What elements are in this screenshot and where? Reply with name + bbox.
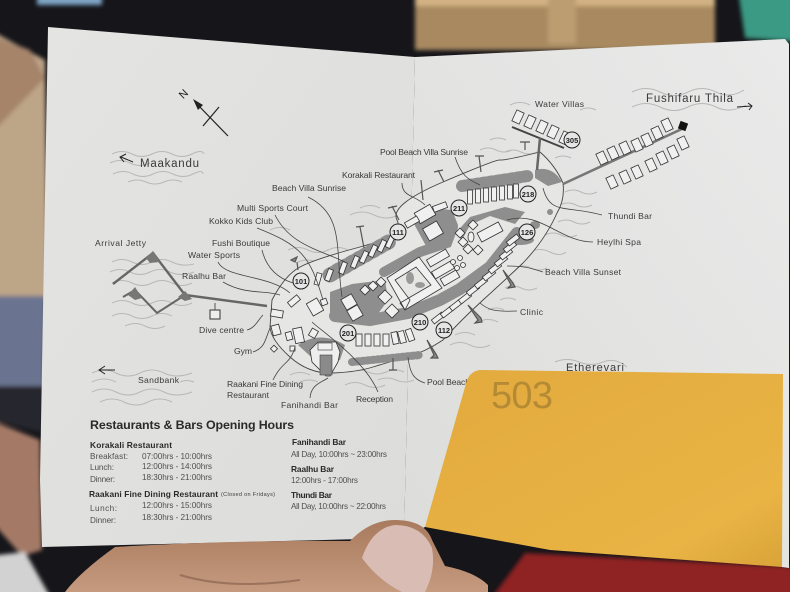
sea waves <box>92 88 746 405</box>
location number markers: 218 <box>522 190 534 199</box>
bars hours: Thundi Bar <box>291 490 333 500</box>
Korakali hours: Korakali Restaurant <box>90 440 172 450</box>
south row villas <box>356 328 415 346</box>
handwritten room number: 503 <box>491 375 553 417</box>
north row villas east <box>468 184 518 204</box>
map labels: Gym <box>234 346 252 356</box>
map labels: Raakani Fine Dining <box>227 379 303 389</box>
restaurant buildings <box>404 202 448 241</box>
yellow envelope <box>425 370 783 567</box>
Korakali hours: 18:30hrs - 21:00hrs <box>142 473 212 482</box>
map labels: Kokko Kids Club <box>209 216 273 226</box>
map labels: Water Sports <box>188 250 240 260</box>
thumb nail <box>362 525 433 592</box>
leader lines <box>218 157 602 398</box>
map labels: Raalhu Bar <box>182 271 226 281</box>
location number markers: 211 <box>453 204 465 213</box>
west shore buildings <box>270 309 318 352</box>
Raakani hours: 12:00hrs - 15:00hrs <box>142 501 212 510</box>
heading: Restaurants & Bars Opening Hours <box>90 418 294 432</box>
small villas centre <box>287 277 399 321</box>
label: Maakandu: Maakandu <box>140 158 199 170</box>
Raakani hours: (Closed on Fridays) <box>221 492 275 498</box>
Raakani hours <box>89 489 275 525</box>
map labels: Arrival Jetty <box>95 238 147 248</box>
bars hours: Fanihandi Bar <box>292 437 347 447</box>
map labels: Beach Villa Sunrise <box>272 183 346 193</box>
location number markers: 305 <box>566 136 578 145</box>
location number markers: 126 <box>521 228 533 237</box>
hand holding the card <box>65 520 488 592</box>
label: Fushifaru Thila: Fushifaru Thila <box>646 93 734 105</box>
panel: opening hours <box>89 418 387 525</box>
panel: right page of card <box>404 39 789 568</box>
location number markers <box>293 132 580 341</box>
location number markers: 101 <box>295 277 307 286</box>
bars hours: Raalhu Bar <box>291 464 335 474</box>
island <box>270 142 563 376</box>
map labels: Dive centre <box>199 325 244 335</box>
north arrow <box>177 87 228 136</box>
map labels: Pool Beach <box>427 377 470 387</box>
label: Sandbank: Sandbank <box>138 375 180 385</box>
bars hours: 12:00hrs - 17:00hrs <box>291 476 358 485</box>
map labels: Fanihandi Bar <box>281 400 338 410</box>
location number markers: 112 <box>438 326 450 335</box>
Korakali hours: Lunch: <box>90 463 114 472</box>
Raakani hours: Lunch: <box>90 504 117 513</box>
location number markers: 201 <box>342 329 354 338</box>
vegetation <box>298 169 562 365</box>
spa building <box>455 220 503 255</box>
Korakali hours: 07:00hrs - 10:00hrs <box>142 452 212 461</box>
map labels: Korakali Restaurant <box>342 170 416 180</box>
map labels: Clinic <box>520 307 544 317</box>
map labels: Multi Sports Court <box>237 203 309 213</box>
label: Etherevari: Etherevari <box>566 362 624 374</box>
location number markers: 210 <box>414 318 426 327</box>
north arrow: N <box>177 87 191 101</box>
bars hours: All Day, 10:00hrs ~ 23:00hrs <box>291 450 387 459</box>
map labels: Heylhi Spa <box>597 237 641 247</box>
map labels: Reception <box>356 394 393 404</box>
east service buildings <box>426 249 466 286</box>
map labels: Water Villas <box>535 99 584 109</box>
map labels: Pool Beach Villa Sunrise <box>380 147 468 157</box>
island outline <box>270 152 563 373</box>
panel: left page of card <box>40 27 415 547</box>
south-east row villas <box>431 234 520 324</box>
label: Fushifaru Thila <box>646 93 752 110</box>
map labels: Beach Villa Sunset <box>545 267 622 277</box>
label: Sandbank <box>99 366 180 385</box>
Raakani hours: Raakani Fine Dining Restaurant <box>89 489 218 499</box>
Korakali hours <box>90 440 212 484</box>
Korakali hours: 12:00hrs - 14:00hrs <box>142 462 212 471</box>
map labels <box>95 99 652 410</box>
location number markers: 111 <box>392 228 404 237</box>
Raakani hours: 18:30hrs - 21:00hrs <box>142 513 212 522</box>
label: Maakandu <box>120 154 199 170</box>
east water villas jetty <box>563 118 689 189</box>
central building <box>387 257 442 310</box>
Raakani hours: Dinner: <box>90 516 116 525</box>
bars hours: All Day, 10:00hrs ~ 22:00hrs <box>291 502 386 511</box>
fanihandi pool and bar <box>310 342 340 376</box>
map labels: Thundi Bar <box>608 211 652 221</box>
bars hours <box>291 437 387 511</box>
small jetties <box>291 142 530 370</box>
map labels: Fushi Boutique <box>212 238 270 248</box>
Korakali hours: Breakfast: <box>90 452 128 461</box>
water villas <box>512 110 571 170</box>
Korakali hours: Dinner: <box>90 475 115 484</box>
north row villas west <box>314 236 395 285</box>
map labels: Restaurant <box>227 390 270 400</box>
arrival jetty <box>113 251 267 319</box>
